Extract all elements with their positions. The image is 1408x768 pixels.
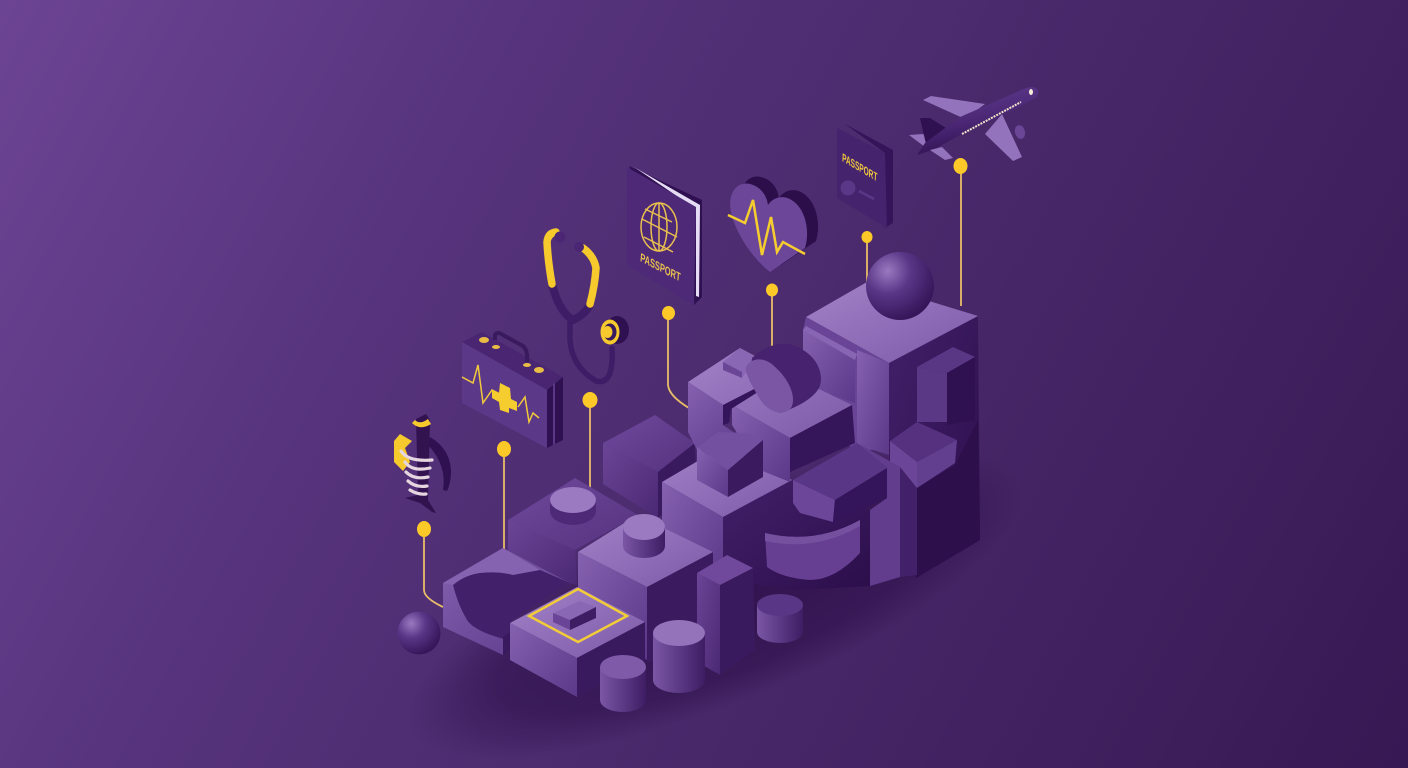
clasps [479,337,544,373]
lower slab [793,443,887,522]
tall block with sphere [803,252,980,578]
large sphere [866,252,934,320]
middle stacked blocks [662,344,917,590]
half cylinder [746,344,821,413]
heartbeat line [462,365,539,422]
back block [603,415,697,518]
icon: passport large [627,166,702,305]
yellow frame [529,589,627,642]
cylinder: large front [653,620,705,693]
side column [857,443,917,586]
pulse line [728,200,805,255]
small cube [697,348,763,497]
icon: syringe helix [394,414,451,513]
small sphere [398,612,440,654]
small passport label: PASSPORT [842,151,878,185]
icon: medical briefcase [462,332,563,448]
cylinder on block [623,514,665,558]
recess in right face [917,347,975,425]
front block with yellow frame [510,587,645,697]
scooped block [443,548,570,655]
handle [495,333,527,362]
icon: heart with pulse [728,177,818,272]
globe emblem [641,203,677,252]
cross [492,383,517,413]
front tall block [697,555,755,675]
icon: stethoscope [547,232,629,382]
cylinder: right [757,594,803,643]
pill [550,487,596,525]
icon: passport small [837,124,893,228]
cylinder: small front [600,655,646,712]
passport label: PASSPORT [640,252,681,285]
block with pill [508,478,638,585]
upper slab [688,348,855,482]
small brick [553,601,596,630]
connector lines and dots [417,158,968,607]
block with cylinder [578,514,713,662]
chest piece [600,316,629,344]
icon: airplane [909,87,1038,161]
ground shadow [400,445,1030,765]
curved bowl [765,520,860,580]
angled wedge [890,420,980,578]
